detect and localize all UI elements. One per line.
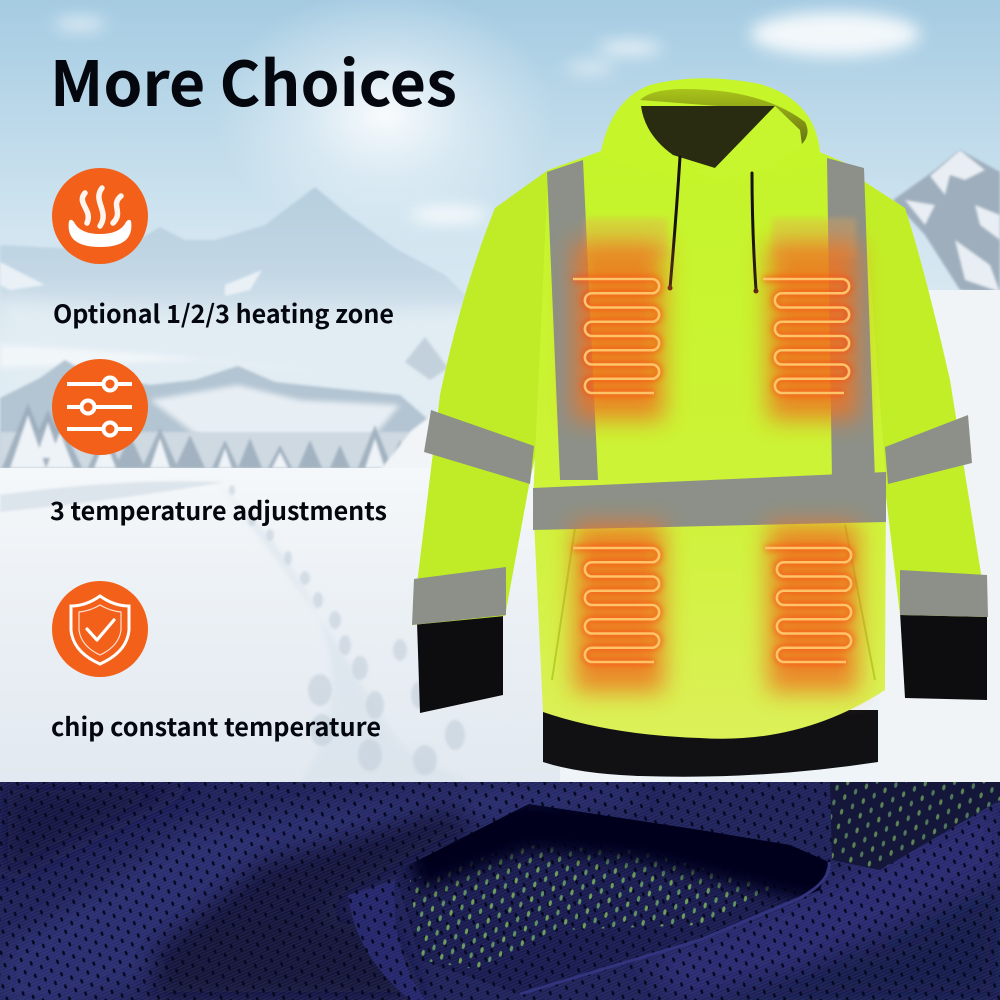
snowy mountain background — [0, 0, 1000, 782]
right-hand rocky peak — [893, 150, 1000, 294]
hood opening — [641, 106, 775, 168]
pocket seams — [552, 525, 875, 680]
label: chip constant temperature: chip constant temperature — [51, 708, 381, 744]
heating glow zones — [574, 242, 858, 692]
title: More Choices — [50, 34, 457, 124]
sleeves — [412, 170, 570, 625]
black hem — [543, 710, 878, 777]
pocket rim — [520, 862, 829, 994]
navy mesh fabric — [0, 782, 1000, 1000]
black cuffs — [417, 612, 987, 713]
faint heat tint — [584, 218, 856, 258]
label: temperature adjustments: 3 temperature adjustments — [50, 492, 387, 528]
heating coils — [573, 279, 851, 662]
reflective stripes — [412, 158, 988, 625]
pine tree line — [2, 403, 412, 468]
hood — [600, 78, 830, 185]
top-right green mesh — [830, 782, 1000, 870]
footprints in snow — [229, 485, 465, 775]
label: heating zone: Optional 1/2/3 heating zone — [53, 295, 394, 331]
icon: shield — [52, 581, 148, 677]
side flap — [348, 880, 425, 1000]
icon: sliders — [52, 359, 148, 455]
light and shadow folds — [0, 782, 1000, 1000]
drawstrings — [668, 157, 758, 294]
hi-vis hoodie — [412, 78, 988, 777]
body — [533, 150, 886, 739]
hood lining — [640, 89, 808, 152]
icon: heat — [52, 168, 148, 264]
pocket inner — [390, 800, 840, 1000]
hood flap — [690, 106, 802, 180]
